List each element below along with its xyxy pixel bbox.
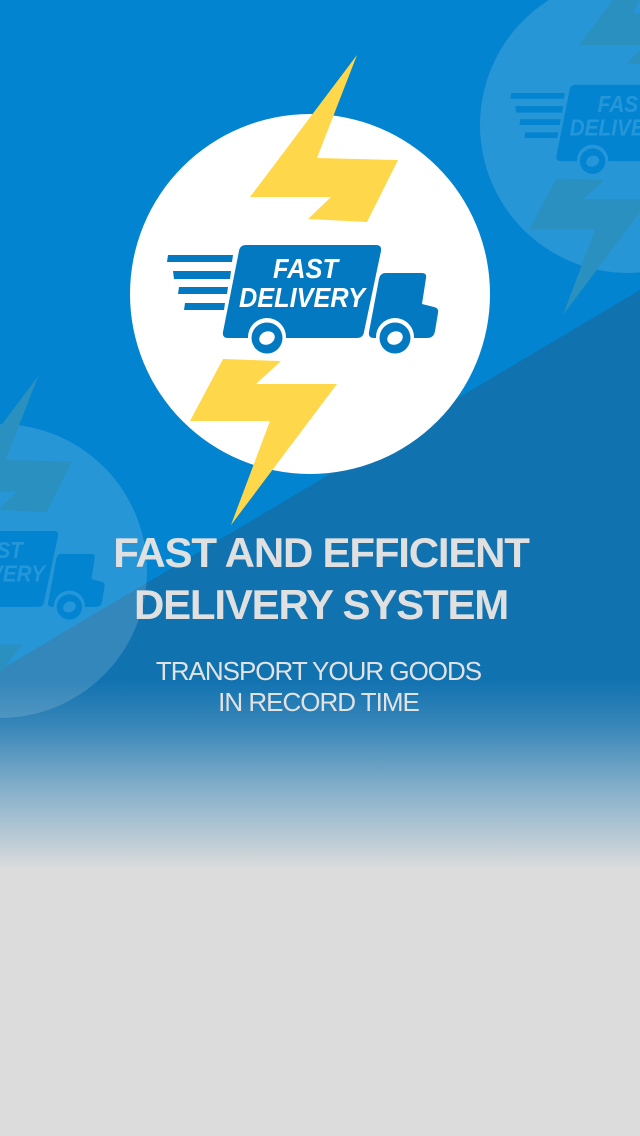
dark diagonal panel (0, 290, 640, 1136)
icon: bottom lightning bolt (190, 359, 337, 525)
title (113, 529, 530, 628)
title: DELIVERY SYSTEM (134, 581, 508, 628)
icon: top lightning bolt (250, 55, 398, 222)
main white circle (130, 114, 490, 474)
subtitle (156, 656, 481, 717)
truck box (223, 245, 381, 338)
truck label: FAST (273, 253, 341, 284)
subtitle: TRANSPORT YOUR GOODS (156, 656, 481, 686)
speed lines (167, 255, 233, 310)
truck cab (369, 273, 438, 338)
faded badge: lower left (0, 376, 147, 760)
solid grey footer (0, 870, 640, 1136)
bottom grey fade (0, 680, 640, 870)
subtitle: IN RECORD TIME (218, 687, 419, 717)
rear wheel (248, 318, 286, 356)
truck label: DELIVERY (239, 282, 367, 313)
truck label (239, 253, 367, 313)
icon: delivery truck (167, 245, 438, 356)
front wheel (376, 318, 414, 356)
title: FAST AND EFFICIENT (113, 529, 529, 576)
faded badge: top right (480, 0, 640, 315)
